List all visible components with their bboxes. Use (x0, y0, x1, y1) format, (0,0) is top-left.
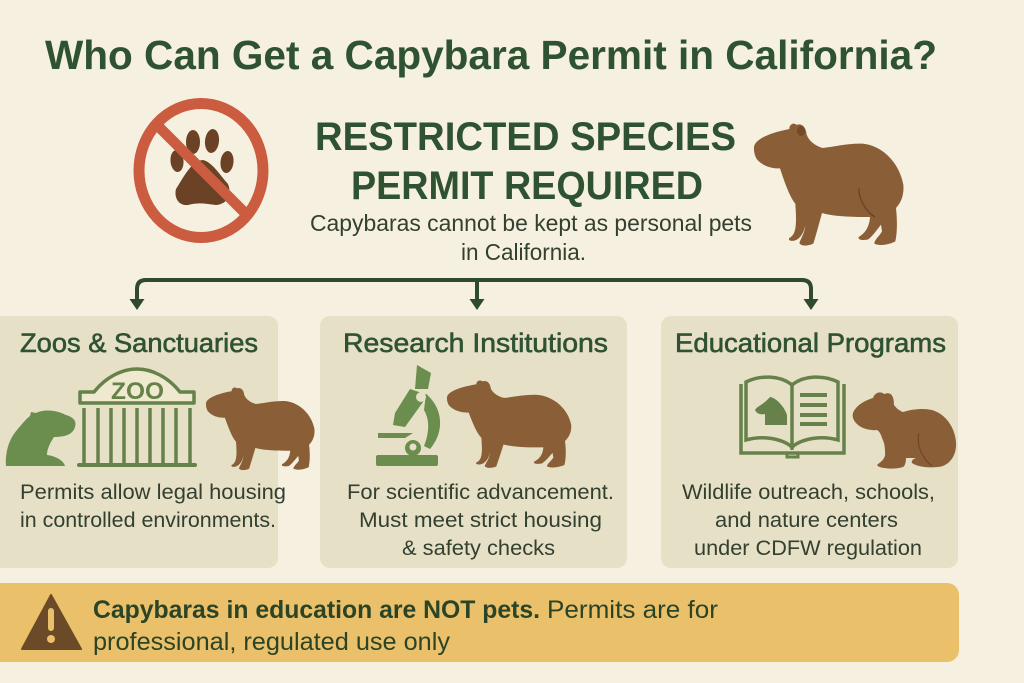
arrows: branch connector (130, 280, 818, 310)
heading: restricted species (315, 115, 736, 208)
text: warning message: Permits are for (547, 596, 718, 624)
heading: restricted species: PERMIT REQUIRED (351, 164, 703, 208)
text: intro note (310, 210, 752, 265)
icon: zoo gate: ZOO (111, 378, 164, 405)
text: educational description: under CDFW regulation (694, 537, 922, 560)
text: zoos description (20, 481, 286, 532)
icon: zoo gate (77, 369, 197, 467)
text: warning message: Capybaras in education are NOT pets. (93, 596, 540, 624)
icon: open book (741, 377, 844, 457)
text: warning message: professional, regulated use only (93, 628, 450, 656)
text: intro note: in California. (461, 239, 586, 265)
icon: capybara main (754, 124, 903, 246)
text: zoos description: Permits allow legal housing (20, 481, 286, 504)
panel: research institutions (320, 316, 627, 568)
icon: no pets paw (139, 104, 263, 238)
icon: warning triangle (22, 595, 81, 649)
text: research description (347, 481, 614, 560)
icon: microscope (376, 365, 440, 466)
heading: educational: Educational Programs (675, 328, 946, 358)
text: intro note: Capybaras cannot be kept as personal pets (310, 210, 752, 236)
panel: zoos and sanctuaries (0, 316, 315, 568)
icon: capybara (206, 387, 315, 470)
icon: green animal silhouette (6, 411, 76, 466)
text: research description: For scientific advancement. (347, 481, 614, 504)
icon: capybara (853, 392, 956, 469)
callout: warning banner (0, 583, 959, 662)
icon: capybara (447, 380, 571, 468)
heading: restricted species: RESTRICTED SPECIES (315, 115, 736, 159)
text: educational description: and nature centers (715, 509, 898, 532)
text: warning message (93, 596, 718, 656)
text: educational description: Wildlife outreach, schools, (682, 481, 935, 504)
title: Who Can Get a Capybara Permit in California? (45, 32, 937, 78)
heading: zoos: Zoos & Sanctuaries (20, 328, 258, 358)
heading: research: Research Institutions (343, 328, 608, 358)
text: zoos description: in controlled environments. (20, 509, 276, 532)
text: educational description (682, 481, 935, 560)
text: research description: & safety checks (402, 537, 555, 560)
text: research description: Must meet strict housing (359, 509, 602, 532)
panel: educational programs (661, 316, 958, 568)
